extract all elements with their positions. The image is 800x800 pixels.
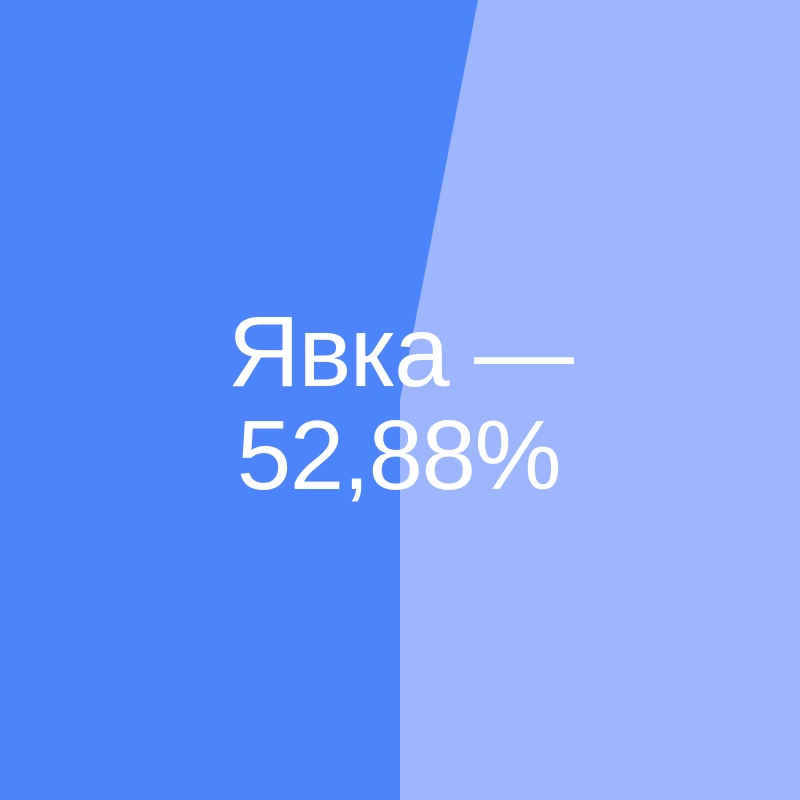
- turnout sector: [0, 0, 478, 800]
- title: turnout: Явка —: [228, 296, 572, 408]
- title: turnout: 52,88%: [237, 400, 560, 510]
